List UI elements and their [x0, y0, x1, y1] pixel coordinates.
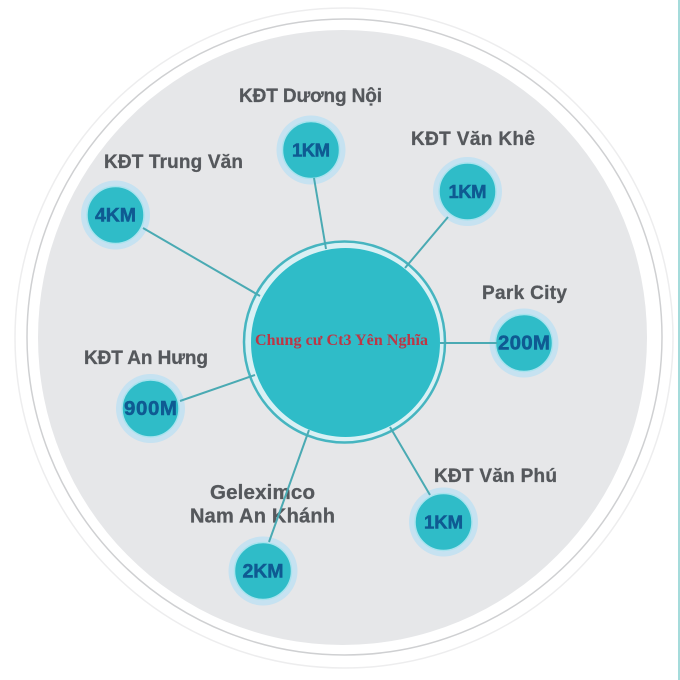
- right edge line: [678, 0, 680, 680]
- node: Geleximco Nam An Khánh: Nam An Khánh: [190, 506, 335, 528]
- node: KĐT Dương Nội: 1KM: [292, 140, 330, 160]
- node: KĐT Văn Khê: [411, 129, 535, 226]
- node: KĐT Dương Nội: [239, 86, 382, 184]
- node: Park City: [482, 283, 567, 378]
- node: Geleximco Nam An Khánh: [190, 481, 335, 606]
- hub title: Chung cư Ct3 Yên Nghĩa: [255, 332, 428, 349]
- node: KĐT Văn Khê: 1KM: [448, 181, 486, 202]
- node: Geleximco Nam An Khánh: 2KM: [242, 560, 284, 582]
- node: KĐT Văn Phú: [409, 466, 557, 556]
- node: Park City: Park City: [482, 283, 567, 304]
- connectors: [143, 178, 497, 542]
- node: KĐT An Hưng: [84, 348, 208, 443]
- node: KĐT Văn Khê: KĐT Văn Khê: [411, 129, 535, 150]
- node: KĐT Dương Nội: KĐT Dương Nội: [239, 86, 382, 107]
- node: KĐT Văn Phú: 1KM: [424, 512, 463, 532]
- node: Park City: 200M: [498, 332, 550, 354]
- node: KĐT Trung Văn: [81, 152, 243, 250]
- node: KĐT An Hưng: 900M: [124, 397, 177, 420]
- node: KĐT Trung Văn: KĐT Trung Văn: [104, 152, 243, 173]
- node: KĐT Văn Phú: KĐT Văn Phú: [434, 466, 557, 487]
- node: KĐT An Hưng: KĐT An Hưng: [84, 348, 208, 369]
- node: KĐT Trung Văn: 4KM: [95, 204, 136, 226]
- node: Geleximco Nam An Khánh: Geleximco: [210, 481, 315, 504]
- central hub: [244, 242, 445, 442]
